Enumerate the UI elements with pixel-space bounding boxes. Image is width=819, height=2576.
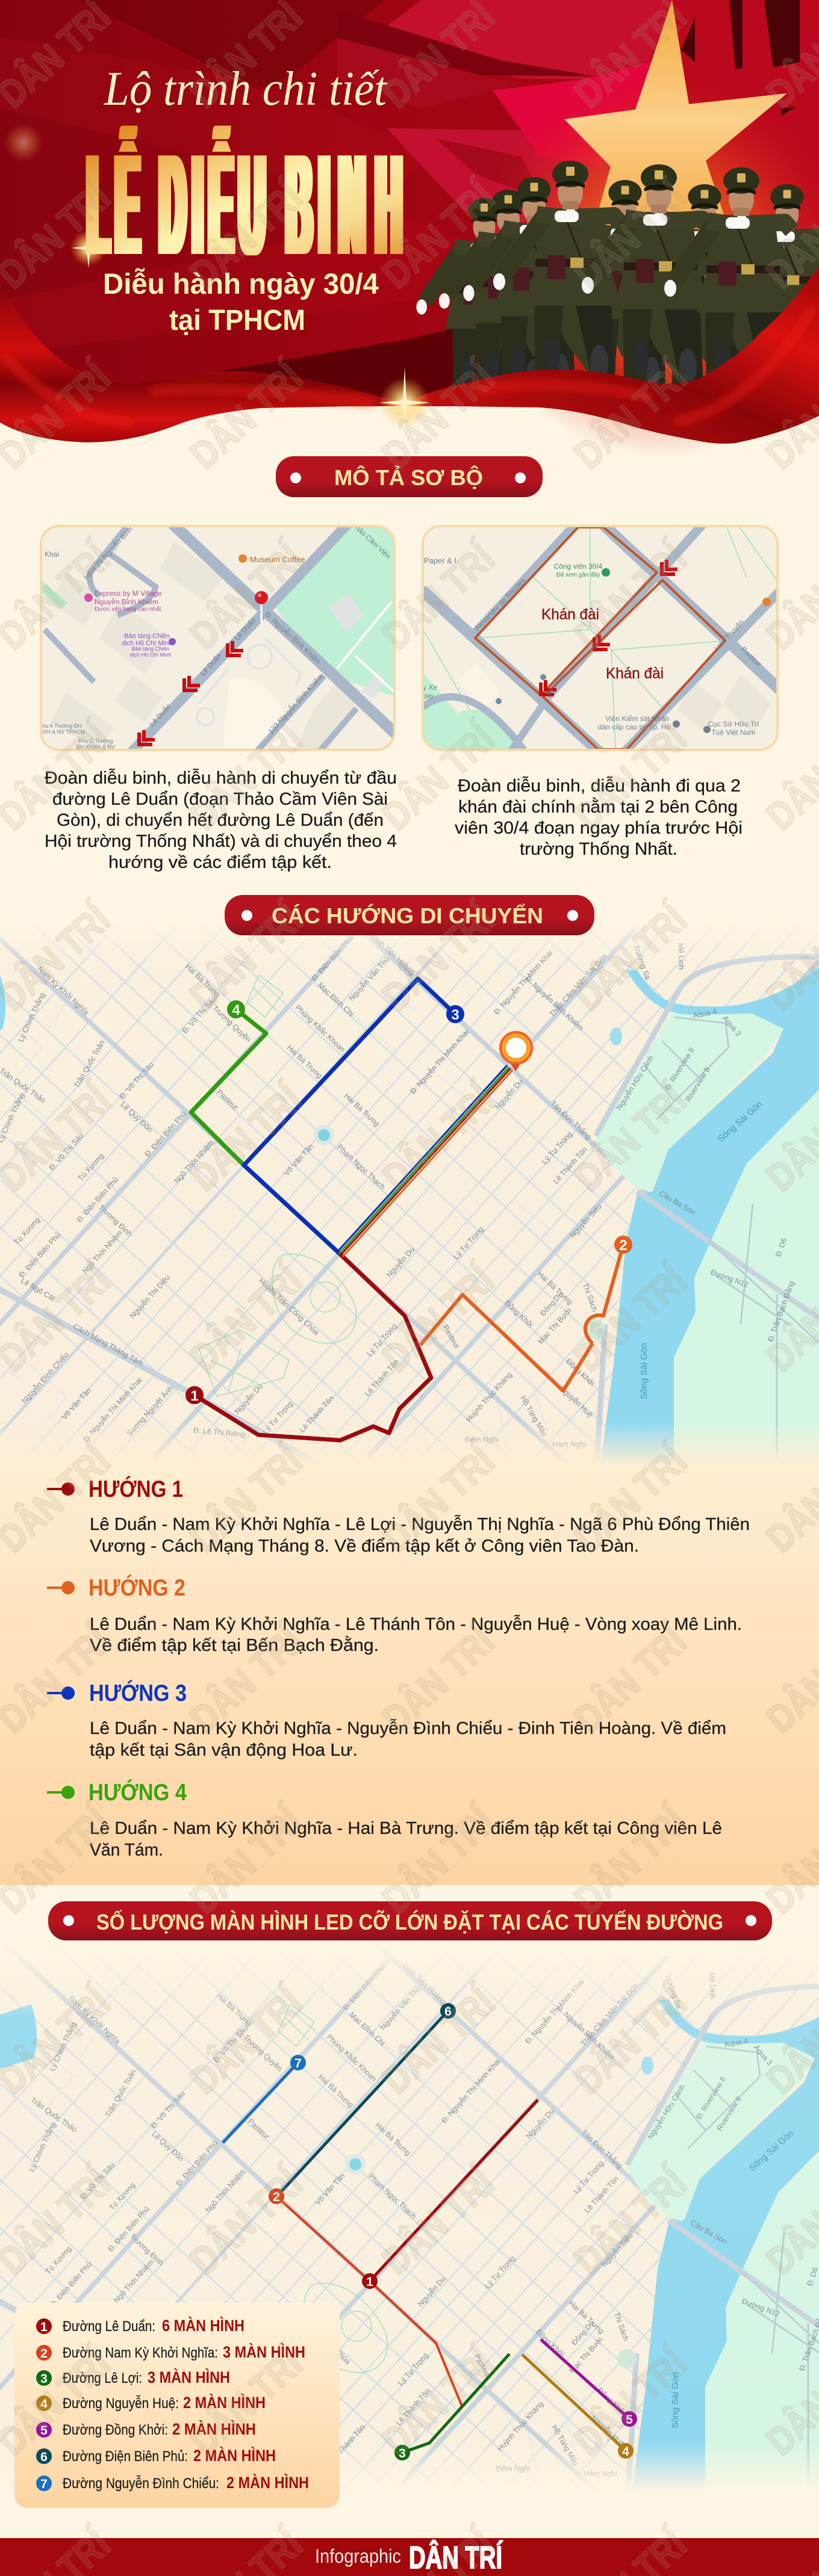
direction 2: Về điểm tập kết tại Bến Bạch Đằng. [90, 1635, 379, 1655]
legend item 4: 2 MÀN HÌNH [183, 2393, 266, 2412]
legend item 1: 1 [40, 2320, 48, 2334]
route 1 dark red [195, 1254, 431, 1440]
panel: map left, Lê Duẩn start: Bảo tàng Chiến [124, 633, 170, 640]
marker 1 [362, 2273, 378, 2289]
route 4 green [191, 1009, 266, 1165]
legend item 7: Đường Nguyễn Đình Chiểu: [63, 2475, 219, 2492]
panel: map left, Lê Duẩn start: Bảo tàng Chiến [132, 646, 169, 652]
text block: right description: Đoàn diễu binh, diễu hành đi qua 2 [458, 776, 741, 796]
panel: map right, stands: Paper & I [424, 556, 456, 565]
marker 2: 2 [619, 1237, 627, 1254]
text block: left description: Hội trường Thống Nhất) và di chuyển theo 4 [45, 832, 397, 851]
panel: map left, Lê Duẩn start: dịch Hồ Chí Minh [129, 652, 172, 658]
direction 3: HƯỚNG 3 [89, 1680, 187, 1706]
text block: left description: Đoàn diễu binh, diễu hành di chuyển từ đầu [45, 768, 397, 788]
direction 4: HƯỚNG 4 [89, 1779, 187, 1806]
legend item 4: 4 [40, 2397, 48, 2411]
section heading: LED screens [48, 1901, 772, 1940]
route 3 blue [244, 979, 455, 1254]
legend item 6 [36, 2446, 276, 2465]
panel: map left, Lê Duẩn start: h Khai [39, 550, 59, 559]
footer: DÂN TRÍ [409, 2540, 503, 2575]
panel: map left, Lê Duẩn start: Thảo Cầm Viên [350, 521, 393, 561]
marker 3 [446, 1005, 464, 1023]
peach gradient background [0, 921, 819, 1885]
text block: left description: hướng về các điểm tập kết. [108, 853, 332, 872]
section heading: MÔ TẢ SƠ BỘ: MÔ TẢ SƠ BỘ [334, 465, 483, 490]
legend item 2: Đường Nam Kỳ Khởi Nghĩa: [63, 2345, 218, 2361]
section heading: CÁC HƯỚNG DI CHUYỂN [225, 895, 594, 935]
left ribbon [0, 287, 410, 442]
direction 1: Lê Duẩn - Nam Kỳ Khởi Nghĩa - Lê Lợi - Nguyễn Thị Nghĩa - Ngã 6 Phù Đổng Thiên [90, 1514, 750, 1534]
panel: map left, Lê Duẩn start: Lê Duẩn [148, 702, 172, 728]
header banner [0, 0, 819, 457]
panel: map right, stands: Lê Duẩn [544, 670, 568, 696]
route chevrons [139, 641, 243, 745]
panel: map right, stands: Viện Kiểm sát Nhân [605, 714, 669, 723]
panel: map left, Lê Duẩn start: 133 Nguyễn Bỉnh Khiêm [266, 672, 325, 735]
panel: map right, stands: Tuệ Việt Nam [712, 728, 755, 737]
marker 5: 5 [626, 2413, 633, 2427]
legend item 5: Đường Đồng Khởi: [63, 2422, 168, 2438]
upper crimson rays [337, 0, 672, 108]
panel: map left, Lê Duẩn start: Khu A Trường ĐH [39, 723, 82, 729]
panel: map right, stands: Đã xem gần đây [556, 571, 600, 578]
map: LED screens [0, 1381, 819, 2504]
line 3 green [402, 2354, 509, 2453]
legend item 6: Đường Điện Biên Phủ: [63, 2448, 188, 2465]
route 2 orange [420, 1295, 593, 1391]
text block: right description: khán đài chính nằm tại 2 bên Công [458, 797, 738, 817]
route 2 roundabout leg [585, 1245, 623, 1343]
subtitle: Diễu hành ngày 30/4 [103, 268, 379, 300]
marker 4: 4 [622, 2445, 629, 2459]
legend item 2 [36, 2342, 305, 2361]
direction 1 [47, 1476, 750, 1556]
legend item 6: 2 MÀN HÌNH [193, 2446, 276, 2465]
legend item 3: 3 [40, 2372, 48, 2386]
line 5 purple [541, 2339, 629, 2419]
panel: map right, stands [422, 524, 780, 752]
text block: right description: trường Thống Nhất. [520, 840, 677, 859]
footer [0, 2538, 819, 2576]
panel: map right, stands: Cục Sở Hữu Trí [708, 720, 759, 728]
marker 3: 3 [451, 1007, 459, 1023]
route start pin [500, 1032, 532, 1071]
panel: map left, Lê Duẩn start: Express by M Village [95, 589, 162, 598]
marker 4 [618, 2443, 634, 2459]
legend panel [14, 2303, 340, 2508]
subtitle [103, 268, 379, 336]
text block: left description: đường Lê Duẩn (đoạn Thảo Cầm Viên Sài [52, 790, 388, 809]
text block: right description [455, 776, 743, 859]
legend item 3: 3 MÀN HÌNH [148, 2368, 230, 2386]
line 2 orange red [276, 2196, 462, 2407]
text block: left description [45, 768, 397, 872]
gold star [564, 0, 787, 229]
panel: map left, Lê Duẩn start: Đ. Nguyễn Bỉnh Khiêm [264, 610, 323, 666]
legend item 6: 6 [40, 2450, 48, 2464]
panel: map left, Lê Duẩn start: Hẻm 25 Nguyễn Bỉnh Khiêm [81, 508, 149, 581]
direction 1: Vương - Cách Mạng Tháng 8. Về điểm tập kết ở Công viên Tao Đàn. [90, 1537, 639, 1556]
direction 4: Văn Tám. [90, 1841, 163, 1860]
panel: map right, stands: Hàn Thuyên [713, 618, 746, 652]
text block: left description: Gòn), di chuyển hết đường Lê Duẩn (đến [57, 811, 384, 830]
panel: map left, Lê Duẩn start: Được xếp hạng cao nhất [95, 605, 161, 613]
legend item 2: 2 [40, 2347, 48, 2361]
panel: map right, stands: Pasteur [740, 645, 764, 668]
panel: map right, stands: dân cấp cao tại Tp. Hồ... [598, 723, 676, 731]
glow sparkles [4, 123, 108, 268]
marker 5 [621, 2411, 637, 2427]
legend item 5 [36, 2420, 256, 2438]
title: script line: Lộ trình chi tiết [104, 63, 388, 116]
panel: map right, stands: Alexandre de Rhodes [473, 577, 527, 633]
direction 2: Lê Duẩn - Nam Kỳ Khởi Nghĩa - Lê Thánh Tôn - Nguyễn Huệ - Vòng xoay Mê Linh. [90, 1614, 742, 1634]
section heading: MÔ TẢ SƠ BỘ [276, 456, 543, 497]
marker 1: 1 [366, 2275, 373, 2289]
legend item 1: Đường Lê Duẩn: [63, 2318, 155, 2335]
section heading: CÁC HƯỚNG DI CHUYỂN: CÁC HƯỚNG DI CHUYỂN [272, 903, 543, 928]
marker 3: 3 [399, 2447, 406, 2460]
direction 2 [47, 1574, 742, 1655]
panel: map left, Lê Duẩn start: Nguyễn Bỉnh Khiêm [95, 597, 158, 606]
title: LỄ DIỄU BINH: LỄ DIỄU BINH [87, 125, 402, 285]
marker 7: 7 [294, 2057, 302, 2070]
section heading: LED screens: SỐ LƯỢNG MÀN HÌNH LED CỠ LỚN ĐẶT TẠI CÁC TUYẾN ĐƯỜNG [96, 1909, 723, 1934]
footer: Infographic [315, 2545, 401, 2567]
stands outlines [475, 527, 725, 749]
legend item 2: 3 MÀN HÌNH [223, 2342, 305, 2361]
legend item 7: 2 MÀN HÌNH [226, 2473, 309, 2492]
panel: map left, Lê Duẩn start: Museum Coffee [250, 555, 305, 564]
direction 3: tập kết tại Sân vận động Hoa Lư. [90, 1741, 358, 1760]
marker 1: 1 [190, 1388, 199, 1404]
marker 4 [227, 1000, 245, 1018]
panel: map right, stands: Công viên 30/4 [554, 562, 603, 571]
upper crimson star tip [493, 60, 653, 167]
line 7 blue [223, 2063, 298, 2143]
legend item 3 [36, 2368, 230, 2386]
marker 4: 4 [232, 1002, 240, 1018]
direction 2: HƯỚNG 2 [89, 1574, 185, 1601]
legend item 4 [36, 2393, 266, 2412]
line 4 amber [522, 2355, 626, 2451]
right red area [672, 0, 762, 118]
direction 4 [47, 1779, 722, 1860]
location pin [255, 591, 268, 622]
panel: map left, Lê Duẩn start: Khu C Trường [78, 738, 113, 744]
text block: right description: viên 30/4 đoạn ngay phía trước Hội [455, 819, 743, 838]
marker 2 [614, 1236, 632, 1254]
line 6 navy [277, 2011, 448, 2196]
stand labels [541, 606, 664, 682]
marker 7 [290, 2055, 306, 2070]
marker 6: 6 [444, 2005, 452, 2019]
legend item 5: 5 [40, 2424, 48, 2438]
lower crimson star tip [387, 128, 611, 234]
marker 1 [185, 1386, 204, 1404]
panel: map right, stands: bay [422, 692, 434, 700]
legend item 5: 2 MÀN HÌNH [172, 2420, 256, 2438]
legend item 4: Đường Nguyễn Huệ: [63, 2395, 179, 2412]
marker 6 [440, 2003, 456, 2019]
stand labels: Khán đài [541, 606, 599, 623]
panel: map left, Lê Duẩn start: Lê Duẩn [199, 652, 223, 678]
marker 2: 2 [273, 2190, 280, 2204]
direction 3 [47, 1680, 726, 1760]
right ribbon [410, 267, 819, 444]
legend item 7: 7 [40, 2477, 48, 2491]
direction 3: Lê Duẩn - Nam Kỳ Khởi Nghĩa - Nguyễn Đình Chiểu - Đinh Tiên Hoàng. Về điểm [90, 1718, 726, 1738]
panel: map left, Lê Duẩn start [36, 508, 397, 752]
legend item 1: 6 MÀN HÌNH [162, 2316, 244, 2335]
panel: map left, Lê Duẩn start: Lê Duẩn [233, 616, 257, 642]
direction 1: HƯỚNG 1 [89, 1476, 183, 1502]
panel: map right, stands: y Xe [423, 683, 437, 692]
panel: map left, Lê Duẩn start: dịch Hồ Chí Minh [122, 640, 172, 647]
direction 4: Lê Duẩn - Nam Kỳ Khởi Nghĩa - Hai Bà Trưng. Về điểm tập kết tại Công viên Lê [90, 1819, 722, 1838]
marker 3 [394, 2445, 410, 2460]
line 1 dark red [370, 2100, 538, 2281]
dark bars behind star [681, 0, 800, 116]
legend item 7 [36, 2473, 309, 2492]
shared Lê Duẩn multi-colour trunk [337, 1065, 512, 1257]
legend item 3: Đường Lê Lợi: [63, 2370, 142, 2386]
stand labels: Khán đài [606, 665, 664, 682]
marker 2 [269, 2188, 284, 2204]
soldiers [416, 161, 819, 400]
route chevrons [541, 560, 677, 695]
panel: map left, Lê Duẩn start: ĐH KHXH & NV [76, 744, 115, 750]
legend item 1 [36, 2316, 244, 2335]
subtitle: tại TPHCM [169, 305, 305, 336]
map: parade directions [0, 351, 819, 1475]
centre sparkle [379, 367, 431, 428]
panel: map left, Lê Duẩn start: KHXH & NV TPHCM [36, 729, 85, 735]
